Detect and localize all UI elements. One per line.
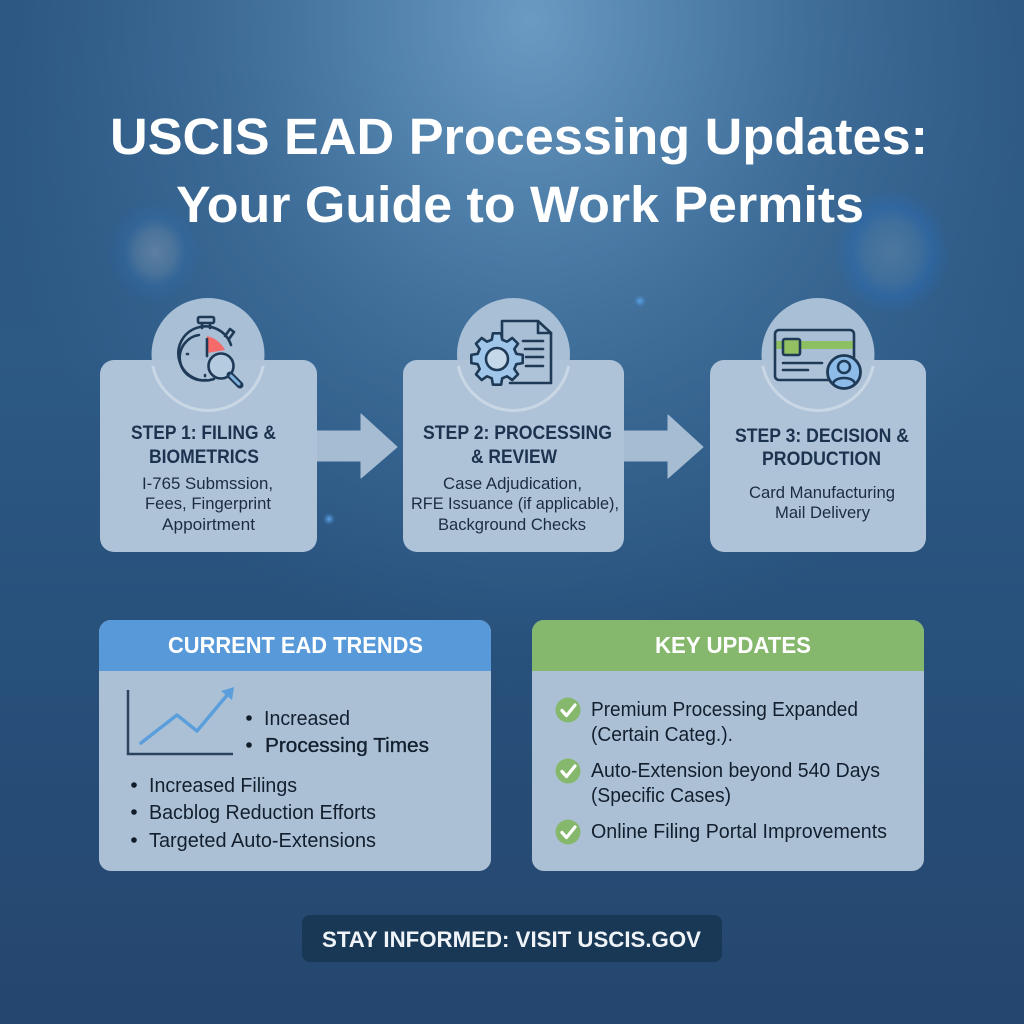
icon: stopwatch with magnifier [178, 317, 240, 385]
trends header band [99, 620, 491, 671]
trends bullet list: Bacblog Reduction Efforts [149, 802, 376, 824]
updates header band [532, 620, 924, 671]
title: Your Guide to Work Permits [176, 176, 864, 233]
trends heading: CURRENT EAD TRENDS [168, 632, 423, 658]
step 2 details: RFE Issuance (if applicable), [411, 494, 619, 513]
arrow: step 2 to step 3 [624, 415, 703, 478]
step 2 heading: STEP 2: PROCESSING [423, 423, 612, 444]
trends bullet list: Targeted Auto-Extensions [149, 830, 376, 852]
updates list: Online Filing Portal Improvements [591, 821, 887, 843]
updates list: (Specific Cases) [591, 785, 731, 807]
updates list: Premium Processing Expanded [591, 699, 858, 721]
icon: check 2 [556, 758, 580, 784]
step 3 details: Card Manufacturing [749, 483, 895, 502]
panel: current EAD trends [99, 620, 491, 871]
icon: check 3 [556, 820, 580, 844]
trends bullet list [131, 708, 429, 852]
step 3 details: Mail Delivery [775, 503, 870, 522]
step 3 details [749, 483, 895, 522]
step 2 heading: & REVIEW [471, 447, 557, 468]
arrow: step 1 to step 2 [317, 414, 397, 478]
trends bullet list: Processing Times [265, 735, 429, 757]
line chart with rising arrow [128, 687, 234, 754]
step 2 heading [423, 423, 612, 468]
step 3 heading: STEP 3: DECISION & [735, 426, 909, 447]
step 1 details: Appoirtment [162, 515, 255, 534]
panel: key updates [532, 620, 924, 871]
panel: step 3 [710, 298, 926, 552]
step 2 details: Background Checks [438, 515, 586, 534]
panel: step 2 [403, 298, 624, 552]
title: USCIS EAD Processing Updates: [110, 108, 928, 165]
trends bullet list: Increased Filings [149, 775, 297, 797]
updates heading: KEY UPDATES [655, 632, 811, 658]
updates list: (Certain Categ.). [591, 724, 733, 746]
title [110, 108, 928, 233]
step 2 details [411, 474, 619, 534]
icon: gear and document [471, 321, 551, 385]
step 1 details [142, 474, 273, 534]
step 1 heading: STEP 1: FILING & [131, 423, 276, 444]
icon: check 1 [556, 698, 580, 722]
call to action [302, 915, 722, 962]
step 1 heading: BIOMETRICS [149, 447, 259, 468]
trends bullet list: Increased [264, 708, 350, 730]
icon: ID card with person [775, 330, 860, 388]
step 3 heading [735, 426, 909, 470]
updates list: Auto-Extension beyond 540 Days [591, 760, 880, 782]
panel: step 1 [100, 298, 317, 552]
step 1 heading [131, 423, 276, 468]
call to action: STAY INFORMED: VISIT USCIS.GOV [322, 927, 701, 952]
step 1 details: Fees, Fingerprint [145, 494, 271, 513]
step 1 details: I-765 Submssion, [142, 474, 273, 493]
updates list [591, 699, 887, 843]
step 2 details: Case Adjudication, [443, 474, 582, 493]
step 3 heading: PRODUCTION [762, 449, 881, 470]
